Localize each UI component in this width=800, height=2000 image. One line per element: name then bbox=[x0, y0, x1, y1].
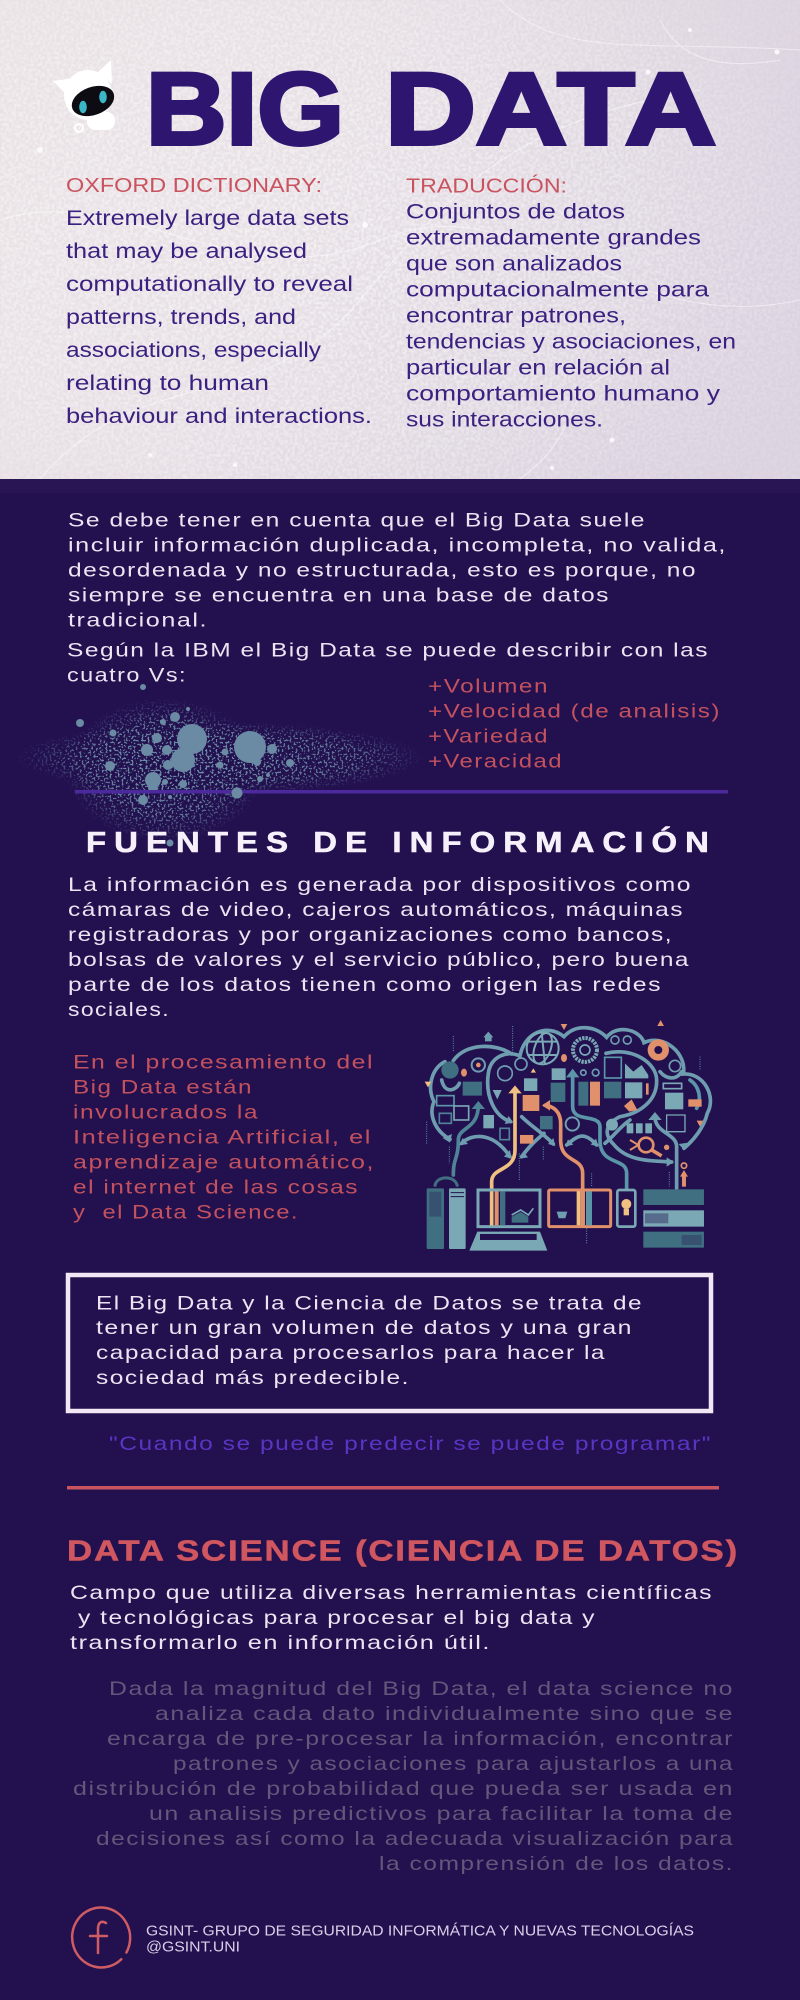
text block: Spanish translation: computacionalmente para bbox=[406, 278, 709, 302]
text block: data science explanation: distribución de probabilidad que pueda ser usada en bbox=[73, 1778, 734, 1800]
text block: data science explanation: la comprensión de los datos. bbox=[379, 1853, 734, 1875]
text block: English definition: associations, especially bbox=[66, 339, 322, 362]
arrowheads bbox=[508, 1085, 522, 1093]
text block: processing note: y el Data Science. bbox=[73, 1201, 299, 1223]
text block: IBM four Vs intro: Según la IBM el Big Data se puede describir con las bbox=[67, 640, 709, 662]
text block: processing note: Inteligencia Artificial, el bbox=[73, 1126, 372, 1148]
heading: Oxford Dictionary: OXFORD DICTIONARY: bbox=[66, 174, 322, 197]
text block: IBM four Vs intro: cuatro Vs: bbox=[67, 665, 187, 687]
text block: Spanish translation: encontrar patrones, bbox=[406, 304, 626, 328]
text block: Spanish translation: tendencias y asociaciones, en bbox=[406, 330, 736, 354]
quote: "Cuando se puede predecir se puede programar" bbox=[109, 1433, 712, 1455]
text block: English definition: relating to human bbox=[66, 372, 269, 395]
text block: IBM four Vs intro bbox=[67, 640, 709, 687]
text block: Big Data caveat: Se debe tener en cuenta que el Big Data suele bbox=[68, 510, 646, 532]
text block: Big Data caveat bbox=[68, 510, 727, 632]
illustration: devices feeding data into cloud bbox=[425, 1020, 710, 1251]
text block: Spanish translation: Conjuntos de datos bbox=[406, 200, 625, 224]
text block: Data Science definition: transformarlo en información útil. bbox=[70, 1632, 491, 1654]
callout box: sociedad más predecible. bbox=[96, 1367, 410, 1389]
text block: English definition: computationally to reveal bbox=[66, 273, 353, 296]
header panel background with network texture bbox=[0, 0, 800, 479]
text block: Spanish translation: sus interacciones. bbox=[406, 408, 603, 432]
list: the four Vs: +Veracidad bbox=[428, 750, 563, 772]
text block: English definition bbox=[66, 207, 372, 428]
callout box bbox=[68, 1275, 711, 1411]
text block: data science explanation: analiza cada dato individualmente sino que se bbox=[155, 1703, 734, 1725]
text block: English definition: Extremely large data sets bbox=[66, 207, 349, 230]
callout box: tener un gran volumen de datos y una gran bbox=[96, 1317, 633, 1339]
phone bbox=[617, 1190, 635, 1227]
scatter cloud graphic bbox=[23, 684, 418, 846]
dark band top edge bbox=[0, 479, 800, 493]
footer text: @GSINT.UNI bbox=[146, 1939, 240, 1956]
list: the four Vs: +Velocidad (de analisis) bbox=[428, 700, 721, 722]
heading: Fuentes de informacion: FUENTES DE INFORMACIÓN bbox=[86, 827, 717, 859]
list: the four Vs bbox=[428, 676, 721, 772]
text block: data science explanation: encarga de pre-procesar la información, encontrar bbox=[107, 1728, 734, 1750]
computer towers bbox=[427, 1188, 444, 1249]
list: the four Vs: +Variedad bbox=[428, 726, 549, 748]
text block: information sources bbox=[68, 874, 692, 1021]
text block: Spanish translation bbox=[406, 200, 736, 432]
heading: Traduccion: TRADUCCIÓN: bbox=[406, 174, 567, 198]
laptop bbox=[478, 1190, 540, 1227]
text block: Data Science definition: y tecnológicas para procesar el big data y bbox=[78, 1607, 596, 1629]
title bbox=[146, 52, 716, 166]
callout box: capacidad para procesarlos para hacer la bbox=[96, 1342, 606, 1364]
text block: processing note: Big Data están bbox=[73, 1076, 253, 1098]
footer text: GSINT- GRUPO DE SEGURIDAD INFORMÁTICA Y NUEVAS TECNOLOGÍAS bbox=[146, 1923, 694, 1940]
text block: Data Science definition: Campo que utiliza diversas herramientas científicas bbox=[70, 1582, 713, 1604]
text block: Spanish translation: comportamiento humano y bbox=[406, 382, 721, 406]
servers bbox=[643, 1189, 704, 1205]
text block: information sources: parte de los datos tienen como origen las redes bbox=[68, 974, 662, 996]
text block: English definition: patterns, trends, and bbox=[66, 306, 296, 329]
text block: information sources: registradoras y por organizaciones como bancos, bbox=[68, 924, 673, 946]
text block: English definition: that may be analysed bbox=[66, 240, 307, 263]
text block: processing note: aprendizaje automático, bbox=[73, 1151, 375, 1173]
text block: processing note: involucrados la bbox=[73, 1101, 259, 1123]
text block: data science explanation: Dada la magnitud del Big Data, el data science no bbox=[109, 1678, 734, 1700]
text block: data science explanation: decisiones así como la adecuada visualización para bbox=[96, 1828, 734, 1850]
callout box: El Big Data y la Ciencia de Datos se trata de bbox=[96, 1292, 643, 1314]
list: the four Vs: +Volumen bbox=[428, 676, 549, 698]
text block: Spanish translation: extremadamente grandes bbox=[406, 226, 701, 250]
icon: facebook circle bbox=[68, 1904, 134, 1971]
small icons bbox=[441, 1061, 621, 1129]
text block: Data Science definition bbox=[70, 1582, 713, 1654]
text block: information sources: bolsas de valores y el servicio público, pero buena bbox=[68, 949, 690, 971]
text block: processing note: el internet de las cosas bbox=[73, 1176, 359, 1198]
text block: data science explanation: patrones y asociaciones para ajustarlos a una bbox=[173, 1753, 734, 1775]
text block: data science explanation: un analisis predictivos para facilitar la toma de bbox=[149, 1803, 734, 1825]
text block: processing note: En el procesamiento del bbox=[73, 1051, 374, 1073]
text block: Big Data caveat: desordenada y no estructurada, esto es porque, no bbox=[68, 560, 697, 582]
title: DATA bbox=[385, 52, 716, 166]
text block: Spanish translation: particular en relación al bbox=[406, 356, 670, 380]
text block: information sources: La información es generada por dispositivos como bbox=[68, 874, 692, 896]
title: BIG bbox=[146, 52, 344, 166]
text block: information sources: sociales. bbox=[68, 999, 170, 1021]
gears bbox=[573, 1038, 597, 1062]
text block: data science explanation bbox=[73, 1678, 734, 1875]
text block: Big Data caveat: tradicional. bbox=[68, 610, 208, 632]
tablet bbox=[549, 1190, 611, 1227]
cloud outlines bbox=[431, 1028, 710, 1162]
icon: white robot mascot bbox=[53, 60, 118, 132]
text block: Big Data caveat: siempre se encuentra en una base de datos bbox=[68, 585, 610, 607]
footer text bbox=[146, 1923, 694, 1956]
text block: Spanish translation: que son analizados bbox=[406, 252, 622, 276]
text block: Big Data caveat: incluir información duplicada, incompleta, no valida, bbox=[68, 535, 727, 557]
text block: processing note bbox=[73, 1051, 375, 1223]
globe bbox=[527, 1031, 559, 1066]
text block: English definition: behaviour and interactions. bbox=[66, 405, 372, 428]
heading: Data Science: DATA SCIENCE (CIENCIA DE DATOS) bbox=[67, 1536, 739, 1568]
data lines to devices bbox=[453, 1073, 677, 1226]
text block: information sources: cámaras de video, cajeros automáticos, máquinas bbox=[68, 899, 684, 921]
